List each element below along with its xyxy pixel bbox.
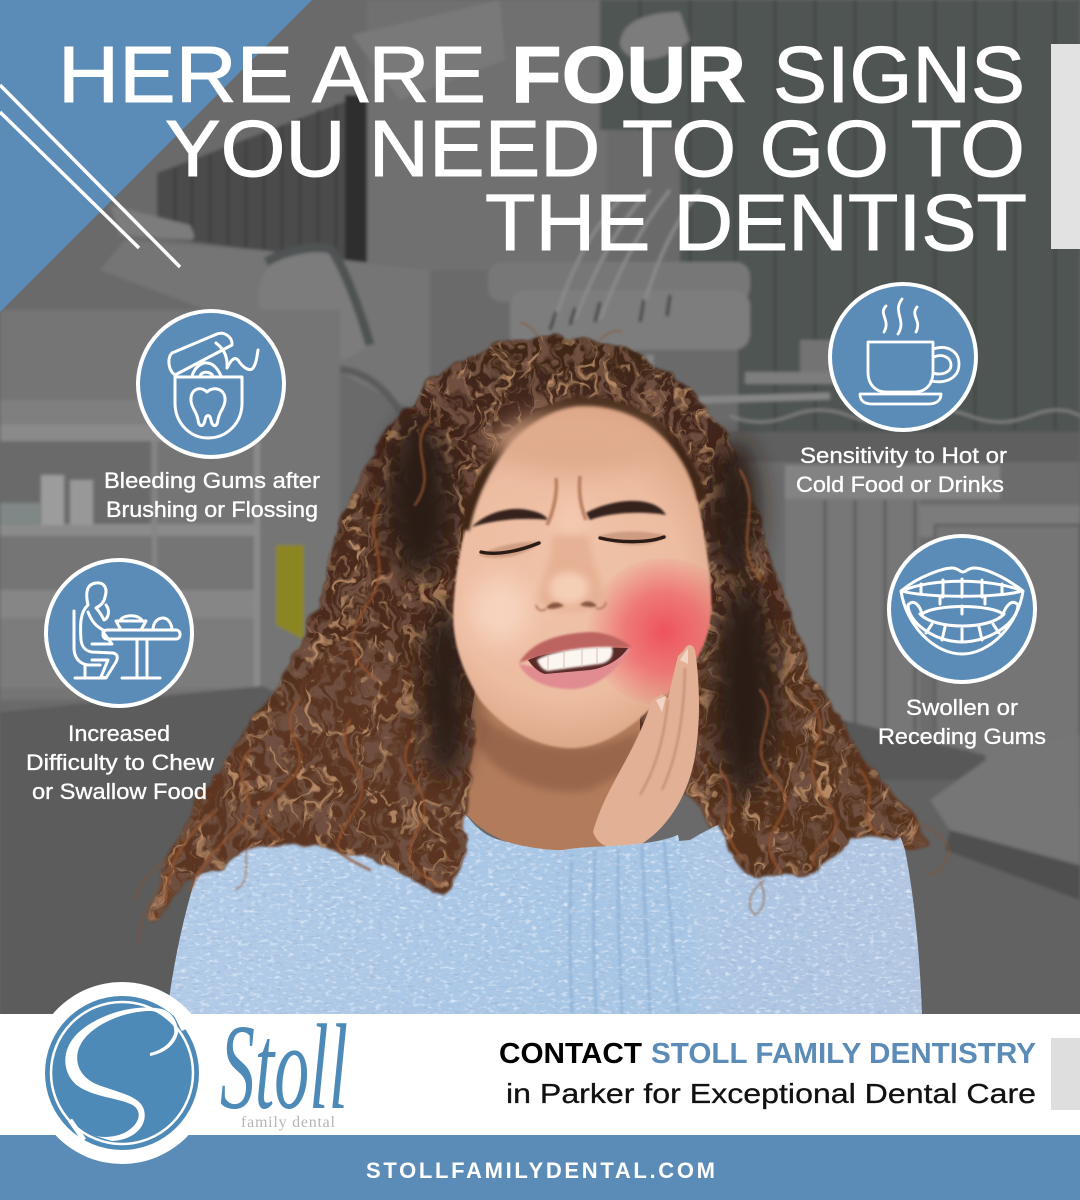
call to action: CONTACT [499,1038,642,1070]
label [878,695,1046,749]
sign: difficulty chewing [26,560,215,804]
white footer band [0,1014,1080,1135]
sign: bleeding gums [104,311,321,522]
website url: STOLLFAMILYDENTAL.COM [366,1158,715,1183]
label: Bleeding Gums after [104,468,321,493]
label: or Swallow Food [32,779,207,804]
label: Difficulty to Chew [26,750,215,775]
sign: sensitivity [796,284,1008,497]
label [104,468,321,522]
logo wordmark: Stoll [220,1000,348,1135]
label [26,721,215,804]
face [453,403,711,748]
triangle accent [0,0,312,312]
red pain glow [590,558,711,704]
lips [519,632,632,689]
title: THE DENTIST [485,178,1027,267]
brows [472,501,666,527]
call to action: in Parker for Exceptional Dental Care [506,1078,1036,1109]
title: SIGNS [773,30,1025,119]
sleeve cuff [549,835,700,1014]
hair back [152,337,930,918]
footer side bar [1051,1038,1080,1110]
logo wordmark: family dental [241,1114,336,1131]
closed eyes [478,532,668,558]
diagonal lines accent [0,85,180,267]
logo emblem [31,982,213,1164]
icon: hot cup [830,284,976,430]
call to action: STOLL FAMILY DENTISTRY [651,1038,1036,1070]
title: YOU NEED TO GO TO [165,104,1025,193]
label: Receding Gums [878,724,1046,749]
icon: person at table [46,560,192,706]
label: Cold Food or Drinks [796,472,1004,497]
blue url bar [0,1135,1080,1200]
title: FOUR [511,30,746,119]
hairline [465,402,702,530]
call to action [499,1038,1036,1109]
icon: open mouth [889,536,1035,682]
curly copper strands [165,420,880,900]
nose [536,535,606,611]
frown crease [547,476,586,525]
hand [593,645,699,849]
logo wordmark [220,1000,348,1135]
dark hair by the face [386,420,777,800]
icon: floss and tooth [138,311,284,457]
label: Increased [68,721,170,746]
label: Swollen or [906,695,1019,720]
title [58,30,1027,267]
neck shadow [478,715,640,792]
sweater [167,793,922,1014]
label [796,443,1008,497]
title: HERE ARE [58,30,486,119]
label: Brushing or Flossing [106,497,318,522]
mouth and teeth [528,647,628,674]
neck [458,690,640,856]
title side bar [1051,44,1080,249]
photo: woman with toothache [135,322,950,1014]
hair over left shoulder [177,640,475,895]
forehead and cheek shading [470,415,655,644]
wisps and curl tips [135,322,950,945]
label: Sensitivity to Hot or [800,443,1008,468]
sign: swollen gums [878,536,1046,749]
hair over right shoulder [700,620,918,880]
